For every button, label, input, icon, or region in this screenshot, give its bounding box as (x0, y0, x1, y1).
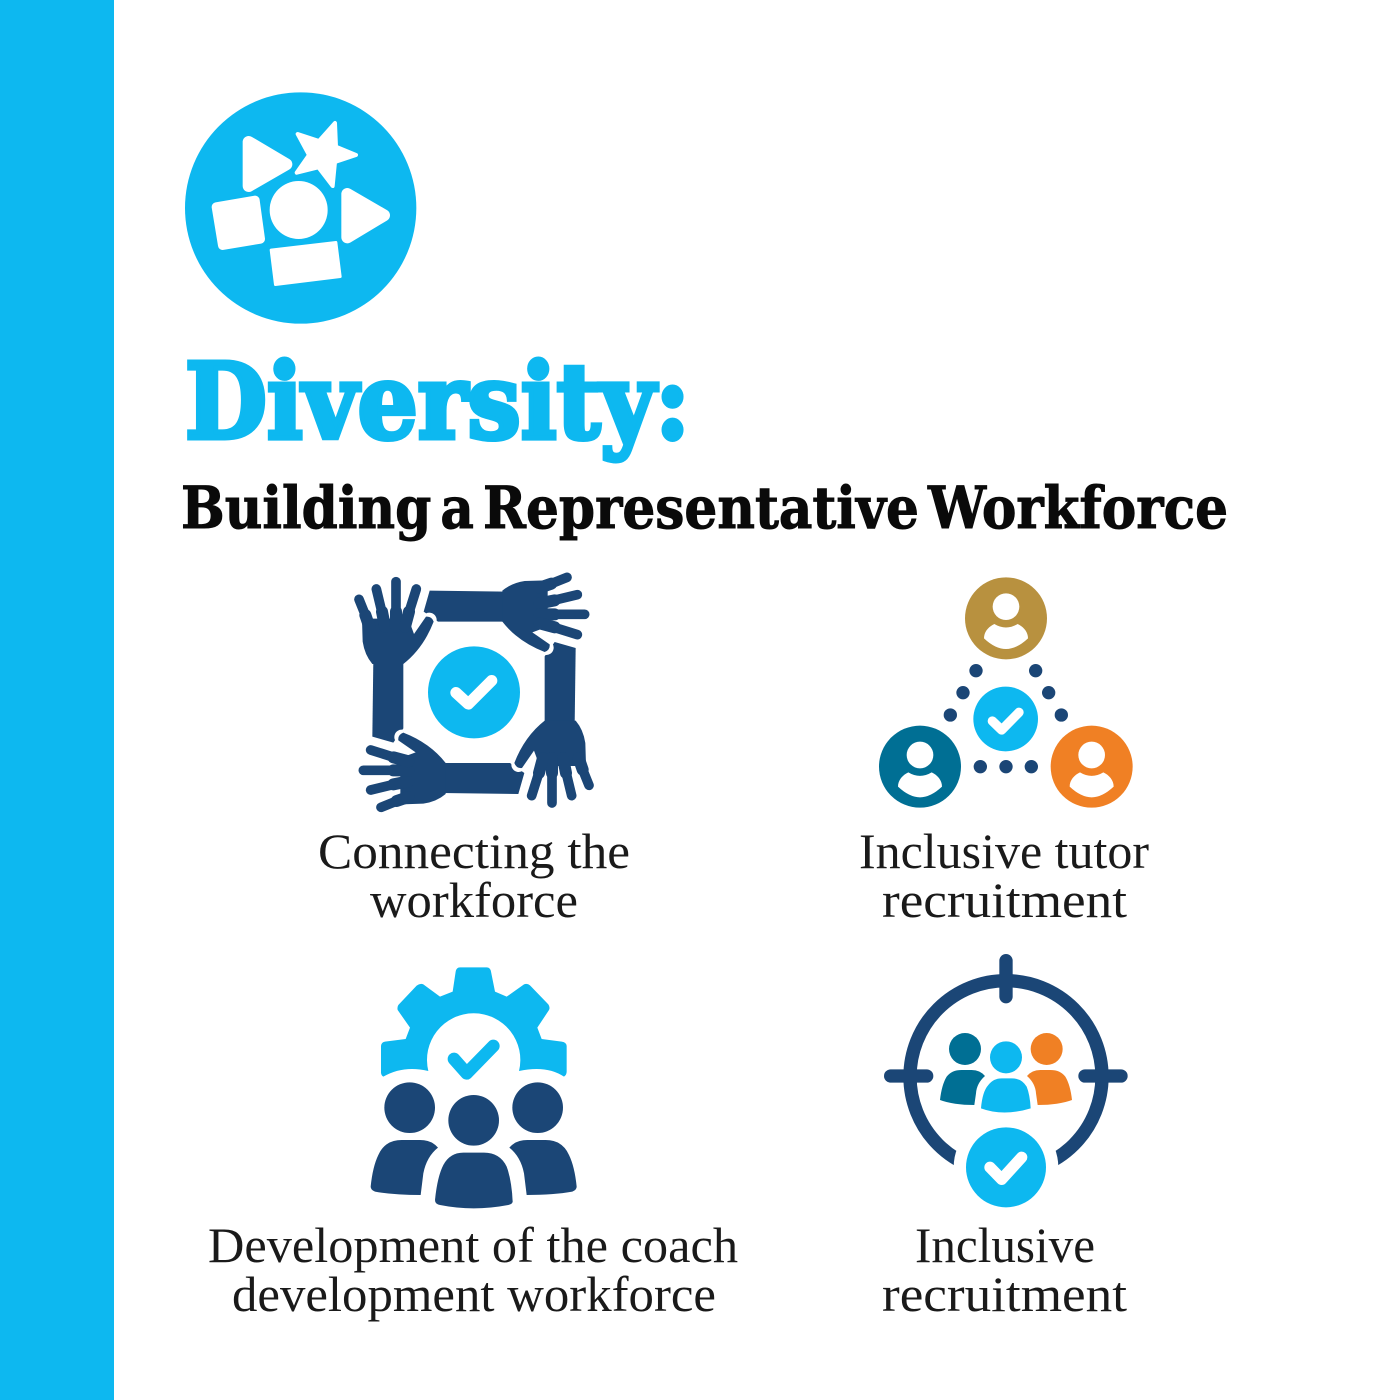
icon: inclusive recruitment target (891, 961, 1121, 1220)
icon: connecting hands (359, 577, 589, 807)
subtitle: Building a Representative Workforce (181, 474, 1228, 542)
label: inclusive tutor: Inclusive tutor (859, 823, 1149, 879)
cyan side bar (0, 0, 114, 1400)
title: Diversity: (185, 340, 690, 463)
icon: diversity shapes (185, 92, 416, 324)
label line: recruitment (second): recruitment (882, 1266, 1127, 1322)
label line: workforce: workforce (370, 872, 578, 928)
label: connecting the workforce: Connecting the (318, 823, 630, 879)
icon: inclusive tutor network (879, 577, 1133, 808)
label: development of the coach: Development of the coach (208, 1217, 738, 1273)
label line: development workforce: development workforce (232, 1266, 716, 1322)
icon: coach development gear (371, 967, 577, 1208)
label line: recruitment: recruitment (882, 872, 1127, 928)
label: inclusive: Inclusive (915, 1217, 1095, 1273)
